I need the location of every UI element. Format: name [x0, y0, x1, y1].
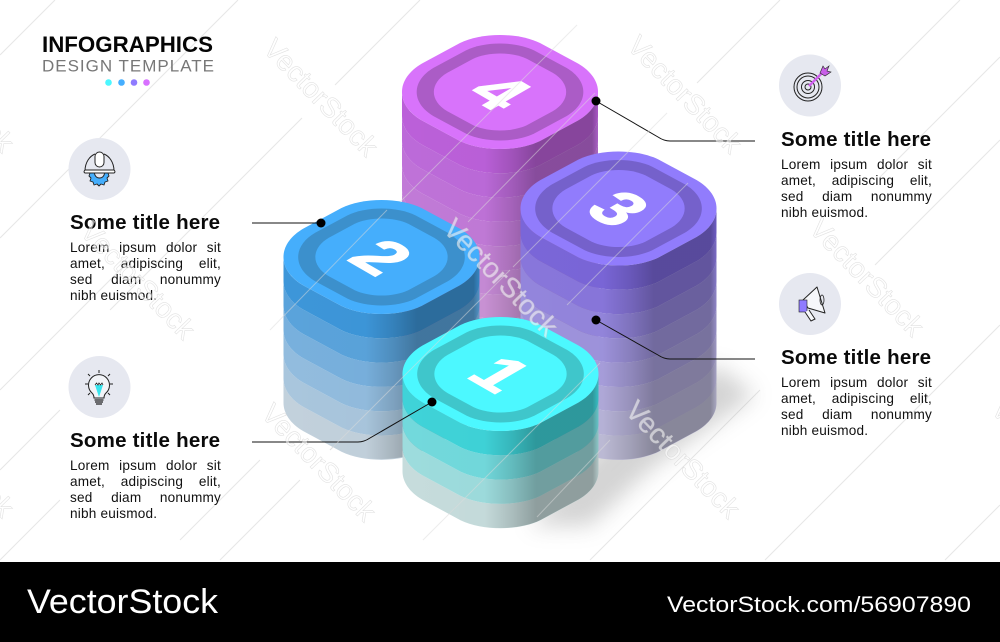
body text: nibh euismod.	[70, 288, 157, 303]
number 1: 1	[453, 346, 548, 402]
block: bottom left text	[70, 429, 221, 521]
body text: nibh euismod.	[781, 423, 868, 438]
title: INFOGRAPHICS	[42, 32, 213, 57]
heading: Some title here	[70, 211, 220, 234]
watermark overlay: VectorStock	[75, 216, 202, 346]
connector: column 2	[252, 218, 326, 228]
icon: helmet and gear	[68, 138, 130, 200]
body text: amet, adipiscing elit,	[70, 256, 221, 271]
body text: Lorem ipsum dolor sit	[781, 157, 932, 172]
watermark overlay: VectorStock	[622, 30, 749, 160]
column 1	[402, 317, 599, 528]
body text	[781, 157, 932, 220]
connector: column 1	[252, 398, 436, 442]
body text: sed diam nonummy	[70, 272, 221, 287]
body text: Lorem ipsum dolor sit	[781, 375, 932, 390]
title dots	[105, 79, 150, 86]
body text	[781, 375, 932, 438]
icon: light bulb	[68, 356, 130, 418]
floor shadow	[530, 365, 755, 526]
body text	[70, 458, 221, 521]
connector: column 3	[592, 316, 755, 359]
column 3	[520, 151, 717, 460]
block: top right text	[781, 128, 932, 220]
icon: target and arrow	[779, 54, 841, 116]
body text: amet, adipiscing elit,	[70, 474, 221, 489]
body text: nibh euismod.	[70, 506, 157, 521]
watermark overlay: VectorStock	[620, 395, 747, 525]
body text	[70, 240, 221, 303]
heading: Some title here	[781, 128, 931, 151]
block: top left text	[70, 211, 221, 303]
title	[42, 32, 214, 76]
heading: Some title here	[781, 346, 931, 369]
watermark overlay: VectorStock	[258, 33, 385, 163]
body text: Lorem ipsum dolor sit	[70, 458, 221, 473]
block: bottom right text	[781, 346, 932, 438]
watermark overlay: VectorStock	[256, 398, 383, 528]
column 4	[402, 35, 598, 392]
body text: sed diam nonummy	[781, 407, 932, 422]
number 4: 4	[452, 64, 548, 120]
body text: sed diam nonummy	[781, 189, 932, 204]
column 2	[283, 200, 480, 460]
body text: Lorem ipsum dolor sit	[70, 240, 221, 255]
title: DESIGN TEMPLATE	[42, 56, 214, 76]
connector: column 4	[592, 96, 755, 141]
footer url: VectorStock.com/56907890	[667, 592, 971, 617]
body text: amet, adipiscing elit,	[781, 391, 932, 406]
body text: sed diam nonummy	[70, 490, 221, 505]
watermark overlay: VectorStock	[804, 213, 931, 343]
number 3: 3	[571, 181, 666, 236]
number 2: 2	[334, 229, 429, 285]
footer logo: VectorStock	[27, 583, 219, 621]
body text: nibh euismod.	[781, 205, 868, 220]
body text: amet, adipiscing elit,	[781, 173, 932, 188]
footer bar	[0, 562, 1000, 642]
watermark overlay: VectorStock	[438, 213, 565, 343]
heading: Some title here	[70, 429, 220, 452]
icon: megaphone	[779, 273, 841, 335]
